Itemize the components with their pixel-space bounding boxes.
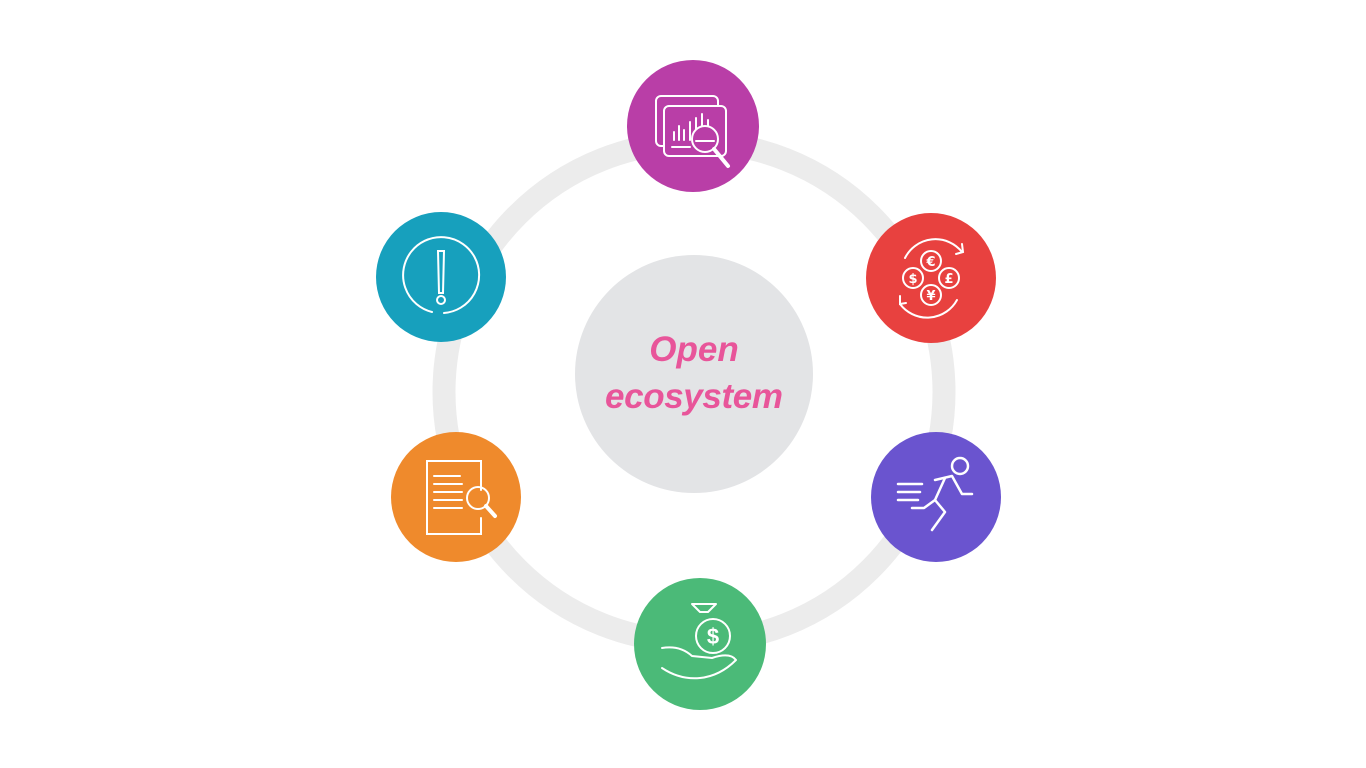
- node: money in hand (bottom): $: [707, 624, 719, 649]
- node: currency exchange (upper right): [866, 213, 996, 343]
- node: analytics (top): [627, 60, 759, 192]
- node: currency exchange (upper right): €: [925, 255, 936, 270]
- ring: [444, 142, 944, 642]
- center circle: [575, 255, 813, 493]
- center subtitle: ecosystem: [605, 377, 783, 416]
- node: currency exchange (upper right): £: [944, 272, 954, 287]
- node: currency exchange (upper right): $: [908, 272, 918, 287]
- node: money in hand (bottom): [634, 578, 766, 710]
- node: alert (upper left): [376, 212, 506, 342]
- node: runner (lower right): [871, 432, 1001, 562]
- node: document search (lower left): [391, 432, 521, 562]
- node: currency exchange (upper right): ¥: [926, 289, 936, 304]
- center title: Open: [649, 330, 739, 369]
